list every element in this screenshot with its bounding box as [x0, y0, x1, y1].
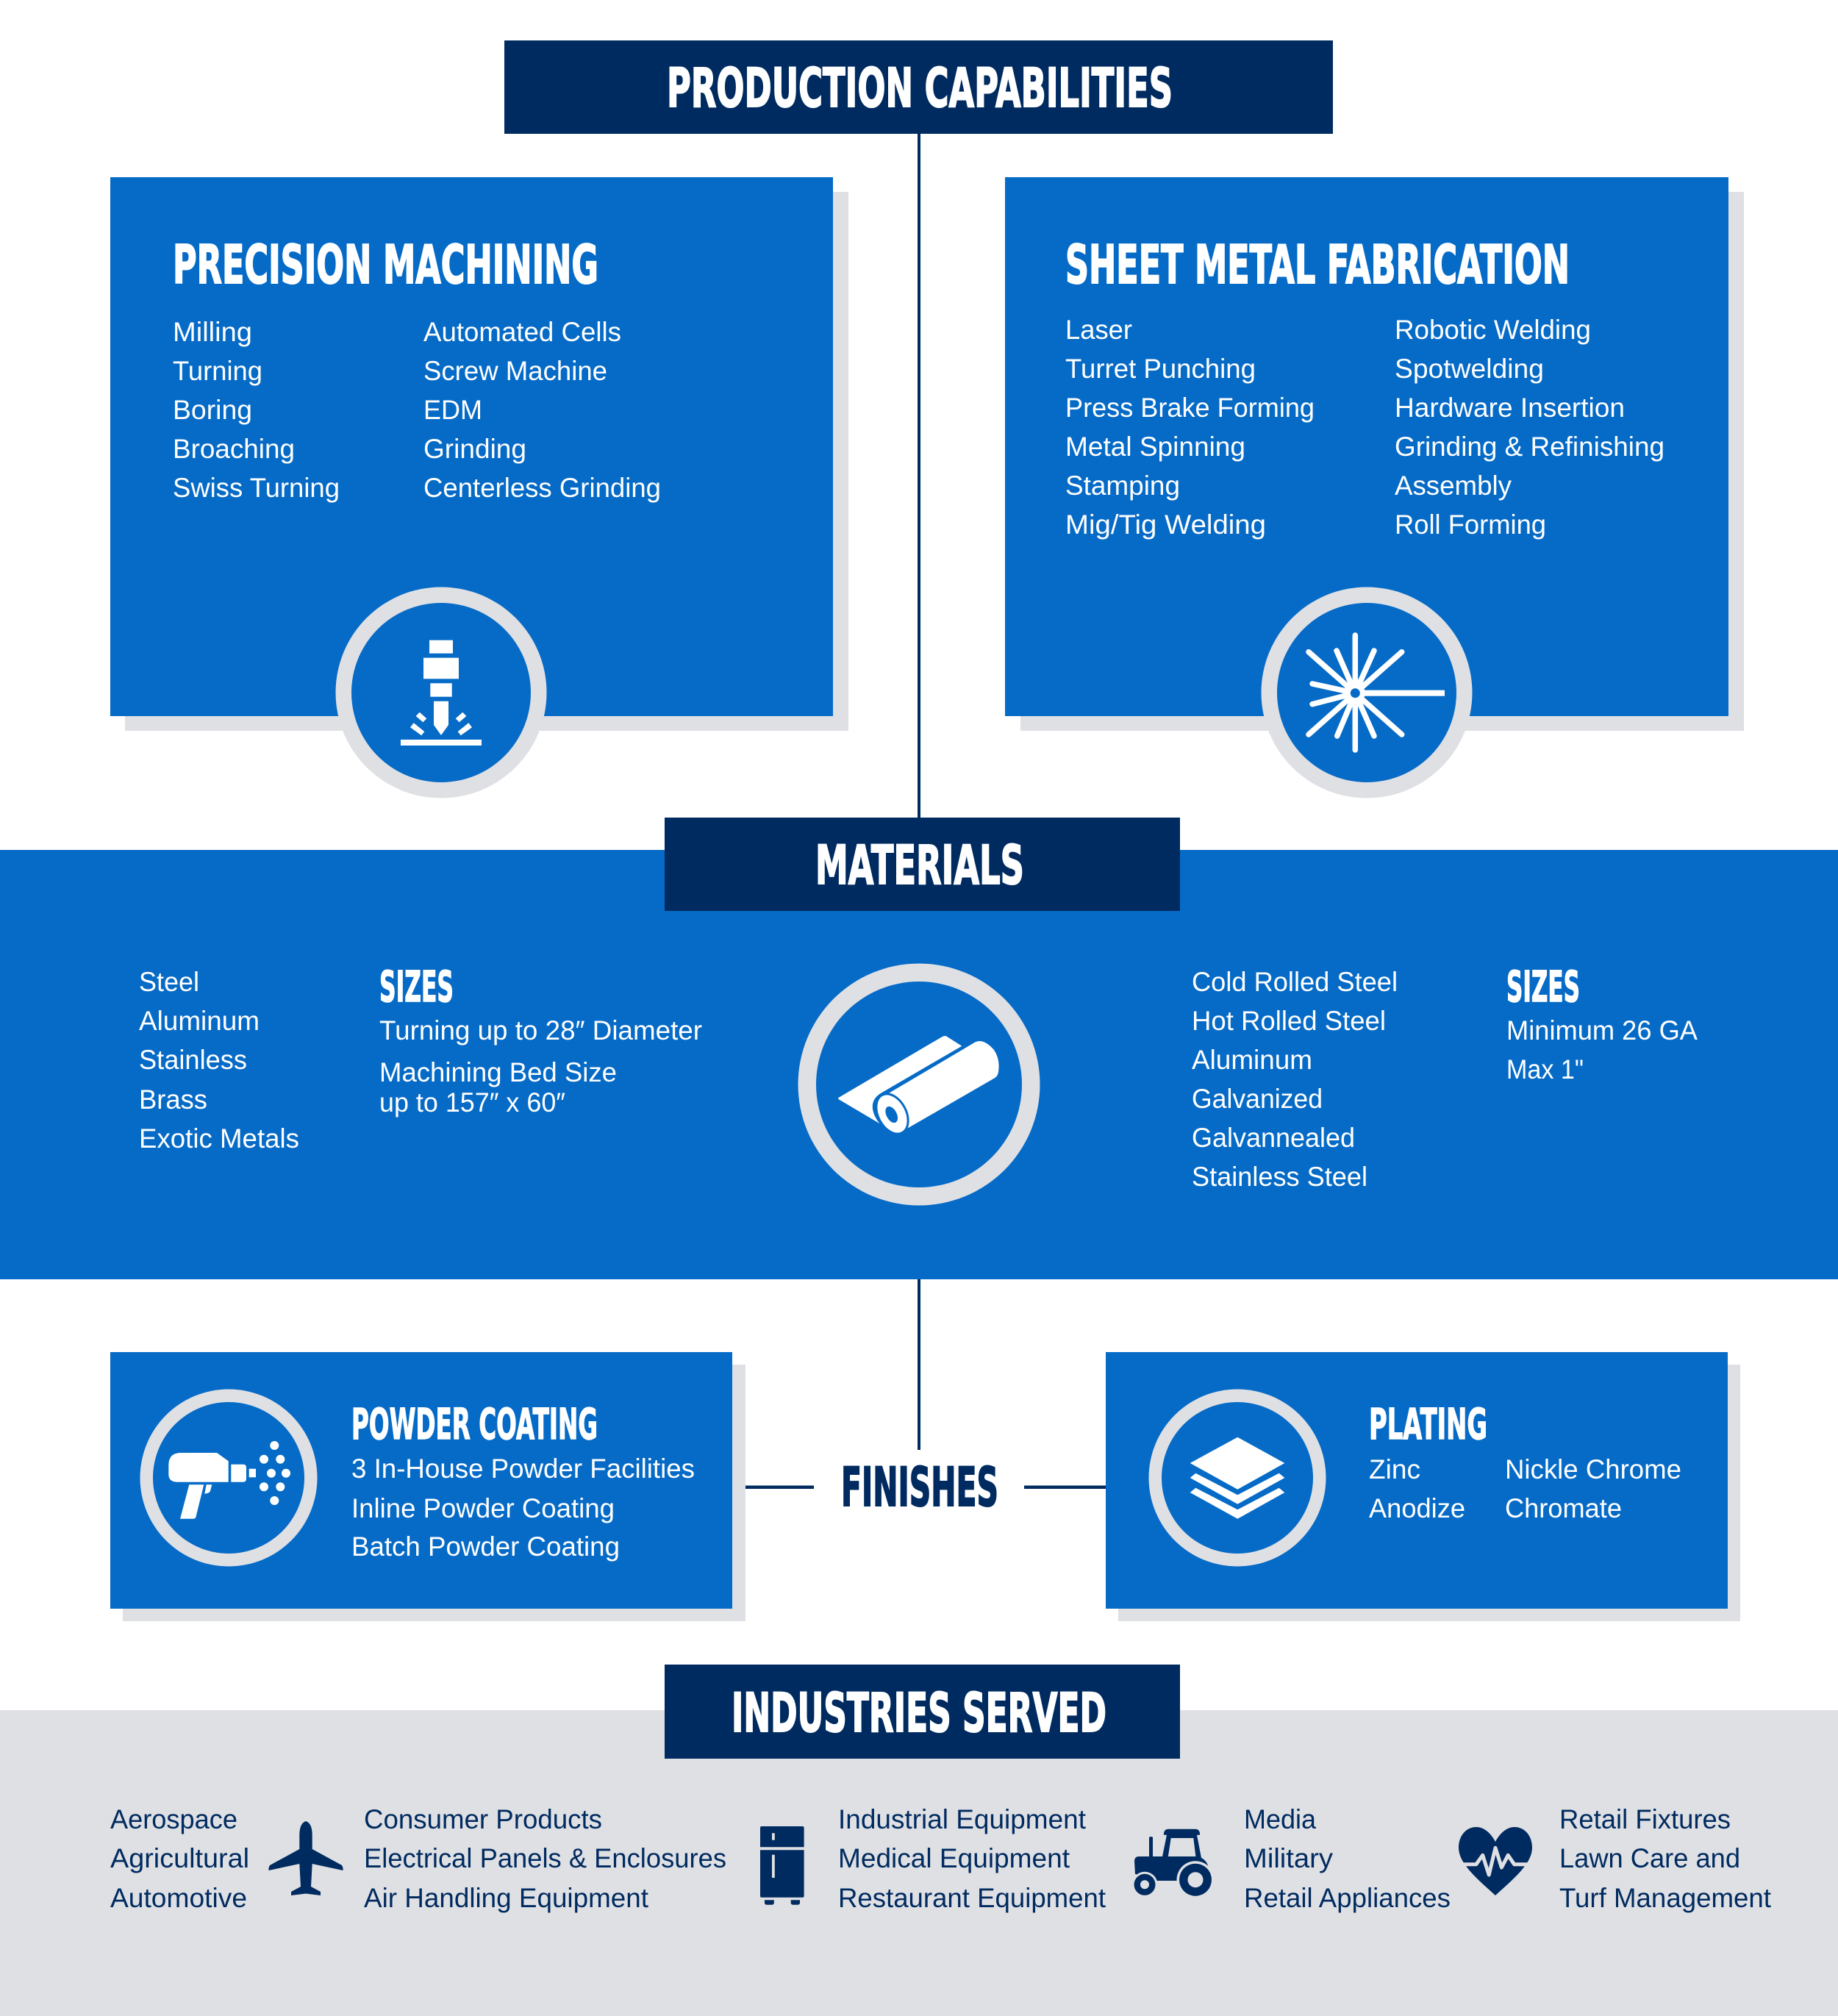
panel: sheet metal fabrication [1005, 177, 1744, 731]
list: sheet metal materials: Aluminum [1192, 1045, 1312, 1075]
text block: machining sizes: Machining Bed Size [379, 1057, 617, 1087]
list: machining processes column 2: Centerless Grinding [423, 473, 661, 503]
heading: materials: MATERIALS [815, 834, 1024, 897]
list: machining processes column 1: Swiss Turning [173, 473, 340, 503]
panel: plating [1106, 1352, 1740, 1621]
list: fabrication processes column 2: Robotic Welding [1395, 315, 1591, 345]
list: sheet metal materials: Galvanized [1192, 1084, 1323, 1114]
list: fabrication processes column 2: Hardware Insertion [1395, 393, 1625, 423]
icon: plating layers [1148, 1390, 1326, 1566]
heading: plating: PLATING [1369, 1399, 1487, 1449]
list: machining processes column 1: Turning [173, 356, 262, 386]
list: machining materials: Aluminum [139, 1006, 260, 1036]
list: industries column 5 [1559, 1804, 1772, 1913]
list: industries column 3: Medical Equipment [838, 1843, 1070, 1873]
icon: tractor [1132, 1829, 1215, 1898]
text block: sheet metal sizes: SIZES [1506, 962, 1580, 1012]
list: industries column 4: Retail Appliances [1244, 1883, 1451, 1913]
list: sheet metal materials: Galvannealed [1192, 1123, 1355, 1153]
list: machining processes column 1: Milling [173, 317, 252, 347]
list: plating types column 1: Anodize [1369, 1493, 1465, 1523]
list: fabrication processes column 1: Laser [1065, 315, 1132, 345]
text block: machining sizes: up to 157″ x 60″ [379, 1087, 565, 1118]
heading: finishes: FINISHES [841, 1456, 998, 1519]
panel: powder coating [110, 1352, 745, 1621]
list: fabrication processes column 2: Spotwelding [1395, 354, 1544, 384]
list: industries column 1: Agricultural [110, 1843, 249, 1873]
list: industries column 1: Aerospace [110, 1804, 237, 1834]
list: machining processes column 2: Automated Cells [423, 317, 621, 347]
list: industries column 2: Consumer Products [364, 1804, 602, 1834]
list: powder coating details [351, 1454, 695, 1562]
list: fabrication processes column 1: Mig/Tig Welding [1065, 510, 1266, 540]
list: fabrication processes column 1: Metal Spinning [1065, 432, 1245, 462]
connector line: capabilities to materials [918, 134, 920, 818]
text block: sheet metal sizes: Max 1" [1506, 1054, 1584, 1084]
list: machining processes column 1 [173, 317, 340, 503]
icon: powder spray gun [140, 1390, 318, 1566]
list: machining processes column 2: Screw Machine [423, 356, 607, 386]
list: machining materials: Stainless [139, 1045, 247, 1075]
list: industries column 4: Military [1244, 1843, 1334, 1873]
heading: powder coating: POWDER COATING [351, 1399, 598, 1449]
list: plating types column 2: Chromate [1505, 1493, 1622, 1523]
list: industries column 2 [364, 1804, 726, 1913]
title: production capabilities: PRODUCTION CAPABILITIES [667, 57, 1173, 120]
list: fabrication processes column 1 [1065, 315, 1315, 540]
list: plating types column 2: Nickle Chrome [1505, 1454, 1681, 1484]
title: production capabilities [504, 40, 1333, 134]
icon: heart with pulse [1456, 1827, 1535, 1895]
list: plating types column 1 [1369, 1454, 1465, 1523]
icon: airplane [268, 1821, 343, 1895]
list: plating types column 1: Zinc [1369, 1454, 1420, 1484]
heading: precision machining: PRECISION MACHINING [173, 234, 598, 296]
list: industries column 5: Lawn Care and [1559, 1843, 1740, 1873]
list: industries column 4: Media [1244, 1804, 1316, 1834]
list: machining processes column 2: Grinding [423, 434, 526, 464]
band: materials [0, 850, 1838, 1279]
list: industries column 1 [110, 1804, 249, 1913]
band: industries served [0, 1710, 1838, 2016]
list: machining materials: Brass [139, 1084, 207, 1115]
icon: refrigerator [760, 1826, 804, 1905]
heading: materials [665, 818, 1180, 911]
list: machining materials: Steel [139, 967, 199, 997]
list: industries column 4 [1244, 1804, 1451, 1913]
icon: laser burst [1262, 587, 1472, 798]
list: powder coating details: Inline Powder Coating [351, 1493, 615, 1523]
heading: industries served: INDUSTRIES SERVED [732, 1682, 1106, 1745]
list: machining materials: Exotic Metals [139, 1123, 299, 1154]
heading: industries served [665, 1665, 1180, 1759]
list: machining processes column 1: Broaching [173, 434, 295, 464]
list: machining processes column 2 [423, 317, 661, 503]
list: fabrication processes column 2: Grinding & Refinishing [1395, 432, 1664, 462]
list: fabrication processes column 2: Assembly [1395, 471, 1512, 501]
list: plating types column 2 [1505, 1454, 1681, 1523]
text block: machining sizes [379, 962, 702, 1118]
list: machining processes column 2: EDM [423, 395, 482, 425]
list: sheet metal materials: Hot Rolled Steel [1192, 1006, 1386, 1036]
list: fabrication processes column 2 [1395, 315, 1664, 540]
list: fabrication processes column 1: Turret Punching [1065, 354, 1256, 384]
list: powder coating details: 3 In-House Powder Facilities [351, 1454, 695, 1484]
list: sheet metal materials: Cold Rolled Steel [1192, 967, 1398, 997]
list: fabrication processes column 2: Roll Forming [1395, 510, 1546, 540]
list: fabrication processes column 1: Press Brake Forming [1065, 393, 1315, 423]
list: powder coating details: Batch Powder Coating [351, 1531, 620, 1562]
connector line: materials to finishes [918, 1279, 920, 1450]
list: industries column 2: Air Handling Equipment [364, 1883, 649, 1913]
text block: sheet metal sizes: Minimum 26 GA [1506, 1015, 1698, 1045]
icon: metal roll [798, 963, 1040, 1206]
list: industries column 5: Retail Fixtures [1559, 1804, 1731, 1834]
list: machining materials [139, 967, 299, 1154]
icon: cnc machining tool [335, 587, 547, 798]
list: industries column 3: Industrial Equipment [838, 1804, 1087, 1834]
text block: sheet metal sizes [1506, 962, 1698, 1084]
list: industries column 5: Turf Management [1559, 1883, 1772, 1913]
list: sheet metal materials [1192, 967, 1398, 1192]
list: industries column 1: Automotive [110, 1883, 247, 1913]
list: industries column 2: Electrical Panels & Enclosures [364, 1843, 726, 1873]
list: industries column 3: Restaurant Equipment [838, 1883, 1106, 1913]
list: sheet metal materials: Stainless Steel [1192, 1162, 1367, 1192]
text block: machining sizes: Turning up to 28″ Diameter [379, 1015, 702, 1045]
list: industries column 3 [838, 1804, 1106, 1913]
text block: machining sizes: SIZES [379, 962, 454, 1012]
list: machining processes column 1: Boring [173, 395, 252, 425]
panel: precision machining [110, 177, 848, 731]
list: fabrication processes column 1: Stamping [1065, 471, 1180, 501]
